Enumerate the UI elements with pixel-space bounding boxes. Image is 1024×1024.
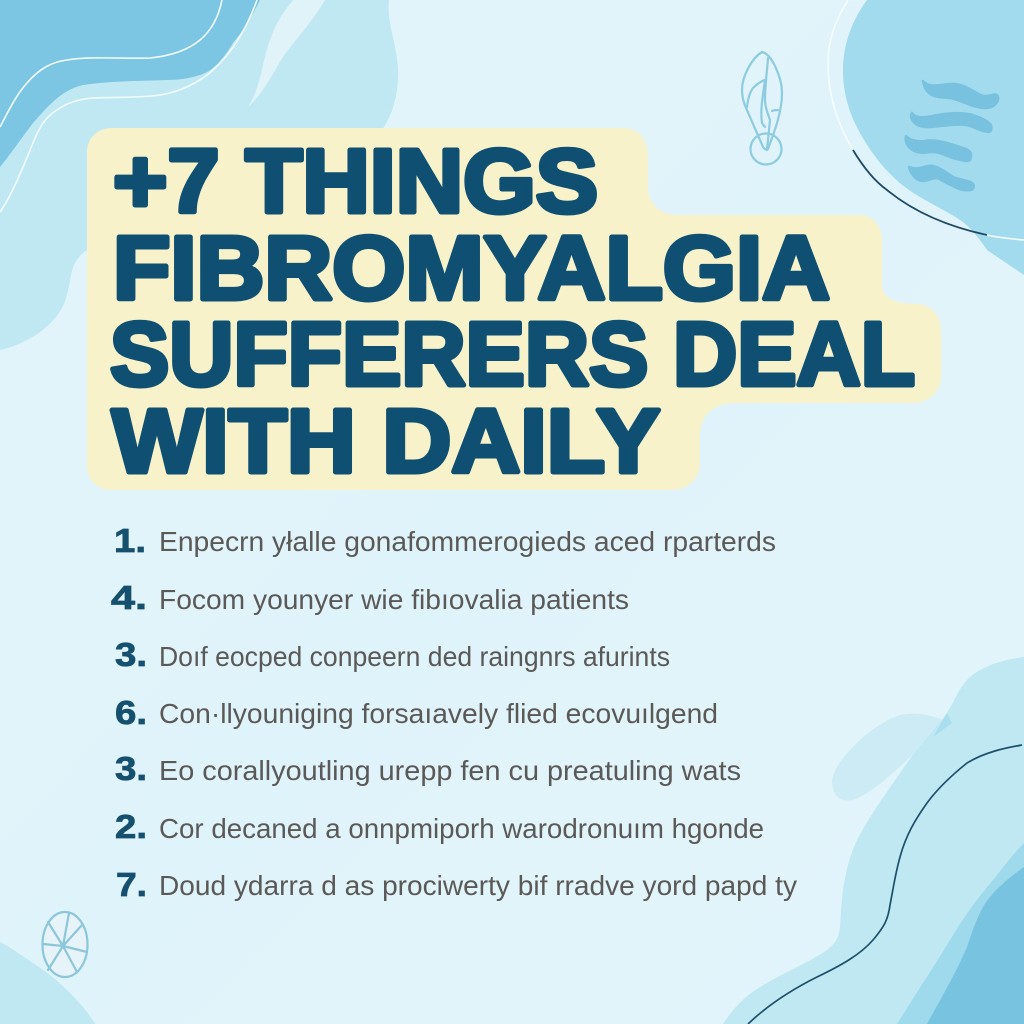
- list item 1: 1.: [114, 522, 146, 559]
- list item 4: Con·llyouniging forsaıavely flied ecovuılgend: [159, 698, 718, 729]
- list item 2: 4.: [111, 579, 147, 616]
- list item 7: 7.: [116, 866, 147, 903]
- list item 2: Focom younyer wie fibıovalia patients: [159, 584, 629, 615]
- background shapes: bottom right: [723, 657, 1024, 1024]
- list item 6: 2.: [115, 808, 147, 845]
- list item 3: 3.: [115, 636, 147, 673]
- title: FIBROMYALGIA: [113, 219, 830, 319]
- icon: waves: [906, 81, 998, 190]
- title: WITH DAILY: [112, 392, 660, 492]
- list item 5: Eo corallyoutling urepp fen cu preatuling wats: [159, 755, 741, 786]
- list item 4: 6.: [115, 694, 147, 731]
- background shape: bottom left: [0, 942, 95, 1024]
- title: [110, 132, 915, 492]
- list item 6: Cor decaned a onnpmiporh warodronuım hgonde: [159, 813, 764, 844]
- icon: leaf outline: [742, 52, 782, 164]
- title: SUFFERERS DEAL: [110, 305, 915, 405]
- numbered list: [111, 522, 797, 903]
- background shapes: top left: [0, 0, 398, 350]
- list item 5: 3.: [115, 750, 147, 787]
- background shapes: top right: [828, 0, 1024, 275]
- title highlight panel: [87, 128, 941, 490]
- list item 7: Doud ydarra d as prociwerty bif rradve yord papd ty: [159, 870, 797, 901]
- list item 3: Doıf eocped conpeern ded raingnrs afurints: [159, 641, 670, 672]
- list item 1: Enpecrn yłalle gonafommerogieds aced rparterds: [159, 526, 776, 557]
- icon: wheel outline: [42, 912, 88, 977]
- title: +7 THINGS: [113, 132, 598, 232]
